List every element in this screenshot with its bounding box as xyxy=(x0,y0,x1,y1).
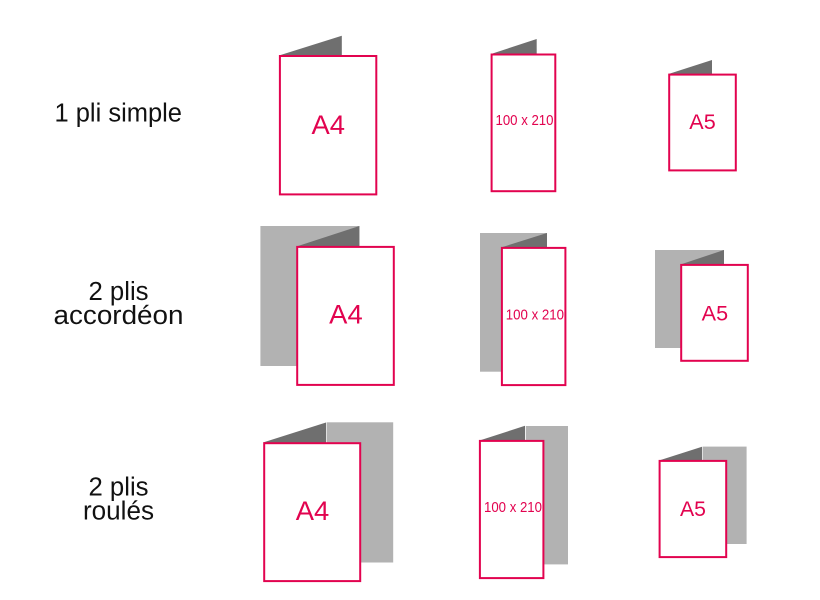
row label: 2 plis roulés xyxy=(83,474,154,525)
row label: 2 plis accordéon: 2 plis xyxy=(88,278,148,306)
row label: 2 plis accordéon: accordéon xyxy=(54,302,184,330)
leaflet: 1 fold 100 x 210 xyxy=(491,39,555,191)
row label: 2 plis accordéon xyxy=(54,278,184,330)
leaflet: 1 fold 100 x 210: 100 x 210 xyxy=(496,112,554,129)
leaflet: accordion A4: A4 xyxy=(329,300,363,330)
leaflet: 1 fold A5: A5 xyxy=(689,111,716,134)
leaflet: 1 fold A4: A4 xyxy=(312,110,345,140)
leaflet: roll fold 100 x 210: 100 x 210 xyxy=(484,499,542,516)
leaflet: roll fold A5: A5 xyxy=(680,498,706,521)
row label: 2 plis roulés: 2 plis xyxy=(88,474,148,502)
leaflet: 1 fold A5 xyxy=(668,60,736,170)
leaflet: accordion A5: A5 xyxy=(702,302,728,325)
leaflet: 1 fold A4 xyxy=(279,36,376,194)
leaflet: roll fold A4: A4 xyxy=(296,496,329,526)
row label: 1 pli simple: 1 pli simple xyxy=(54,100,182,128)
row label: 2 plis roulés: roulés xyxy=(83,497,154,525)
leaflet: accordion A5 xyxy=(655,250,748,361)
leaflet: roll fold A5 xyxy=(659,447,747,557)
leaflet: roll fold 100 x 210 xyxy=(480,426,568,578)
leaflet: accordion 100 x 210 xyxy=(480,233,565,385)
leaflet: accordion A4 xyxy=(260,226,394,385)
leaflet: roll fold A4 xyxy=(263,422,393,581)
leaflet: accordion 100 x 210: 100 x 210 xyxy=(506,306,564,323)
